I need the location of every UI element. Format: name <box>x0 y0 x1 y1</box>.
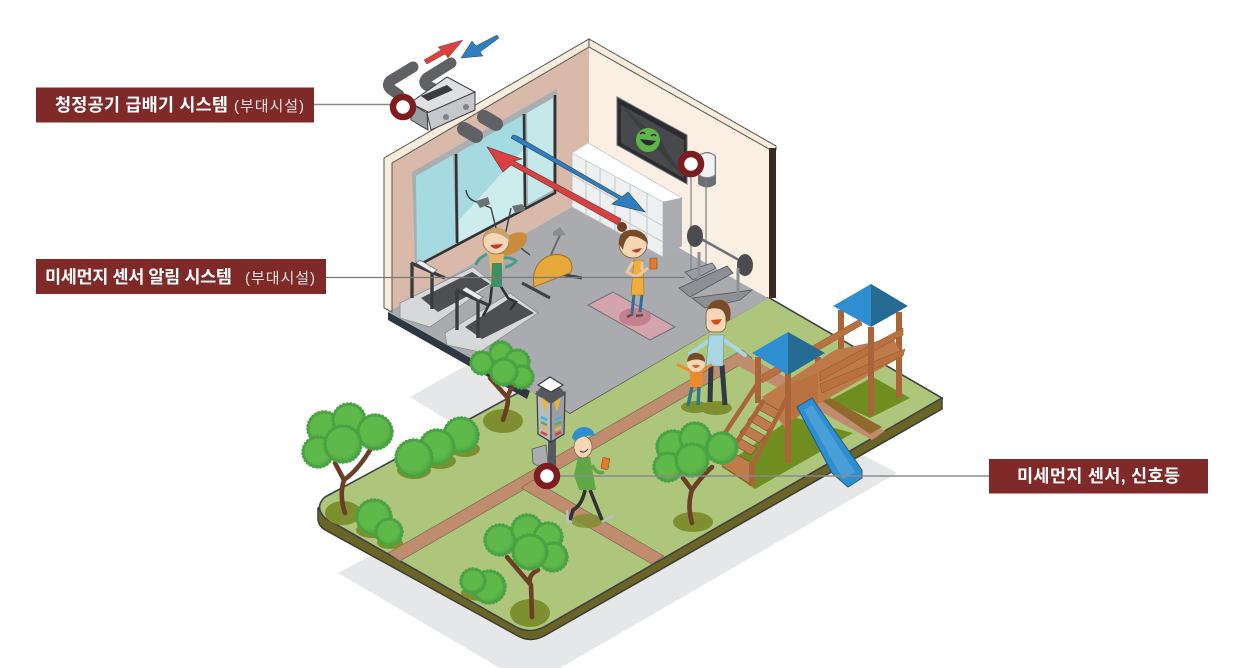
blue airflow arrow <box>511 135 645 212</box>
tree: right <box>654 423 737 532</box>
leader line: air system <box>314 104 396 106</box>
label: dust sensor and signal: 미세먼지 센서, 신호등 <box>1017 466 1180 486</box>
window <box>412 89 557 266</box>
right wall top edge <box>589 39 776 150</box>
yoga mat <box>588 292 675 340</box>
label: dust sensor alert system <box>36 259 326 294</box>
rear path shade <box>822 398 882 434</box>
sensor and traffic light kiosk <box>532 377 566 468</box>
glass right <box>527 98 553 204</box>
floor <box>388 197 768 413</box>
label: air supply system <box>36 88 314 122</box>
side panel <box>790 372 818 422</box>
weight rack and bench <box>679 170 753 308</box>
air quality indicators <box>541 417 561 435</box>
kiosk left face <box>537 392 551 442</box>
right wall end <box>769 148 776 298</box>
marker: air system <box>393 97 413 117</box>
treadmill front <box>445 287 538 352</box>
trash can <box>532 445 548 466</box>
front rail <box>820 328 903 381</box>
stairs <box>722 383 787 486</box>
right wall <box>589 39 776 298</box>
unit top <box>410 77 475 114</box>
intake arrow blue <box>461 35 499 58</box>
treadmill rear <box>400 260 493 327</box>
glass left <box>416 155 456 264</box>
smiley <box>636 128 660 152</box>
playground <box>722 284 908 487</box>
air vents <box>464 117 496 136</box>
man <box>690 300 745 405</box>
man with child shadows <box>681 401 732 415</box>
pipes <box>388 67 413 95</box>
playground ground shade <box>722 377 910 489</box>
slide <box>797 398 862 487</box>
window dark frame <box>417 95 555 266</box>
label: dust sensor alert system: 미세먼지 센서 알림 시스템 <box>45 267 232 287</box>
tree: left <box>303 404 392 525</box>
exercise bike front <box>522 227 582 298</box>
ground shadows <box>338 362 897 668</box>
label: dust sensor and signal <box>989 459 1208 494</box>
treads <box>722 401 782 484</box>
platform side edge <box>318 398 942 640</box>
rear rail <box>760 319 862 383</box>
right roof <box>833 284 908 327</box>
unit front <box>427 92 475 130</box>
walking path rear <box>737 357 885 440</box>
left tower rear posts <box>758 357 818 403</box>
bushes lower left <box>356 500 403 549</box>
glass middle <box>458 115 525 242</box>
leader line: traffic light <box>552 475 989 477</box>
label: air supply system: 청정공기 급배기 시스템 <box>55 95 228 115</box>
tree: top <box>471 342 533 433</box>
lockers <box>572 143 682 258</box>
floor base <box>388 312 530 399</box>
right tower rear posts <box>841 310 899 398</box>
wall sensor device <box>698 152 716 188</box>
tree: bottom <box>485 515 567 627</box>
woman with phone <box>617 222 657 317</box>
garden platform <box>318 297 942 640</box>
left wall top cap <box>384 39 589 312</box>
TV screen <box>617 97 687 184</box>
left wall <box>384 39 589 312</box>
bushes bottom <box>461 569 505 603</box>
bushes row <box>396 418 480 479</box>
walking path cross <box>521 480 664 564</box>
woman on treadmill <box>476 228 516 316</box>
window frame <box>412 89 557 264</box>
front posts <box>788 327 871 463</box>
exhaust arrow red <box>424 40 463 64</box>
kiosk right face <box>551 392 565 442</box>
label: dust sensor alert system: (부대시설) <box>245 270 315 287</box>
deck <box>762 338 903 432</box>
child <box>678 353 711 406</box>
exercise bike rear <box>466 190 531 261</box>
lawn <box>320 297 942 630</box>
label: air supply system: (부대시설) <box>234 98 304 115</box>
leader line: dust sensor <box>326 276 685 278</box>
glass reflection <box>459 150 525 242</box>
room base and floor <box>388 197 768 413</box>
exhaust unit <box>388 63 475 130</box>
unit side <box>410 103 428 130</box>
runner <box>567 427 614 528</box>
kiosk top <box>538 377 563 392</box>
marker: room sensor <box>681 154 701 174</box>
red airflow arrow <box>487 147 621 225</box>
left roof <box>752 332 825 375</box>
walking path main <box>388 350 752 561</box>
marker: outdoor sensor <box>537 466 557 486</box>
